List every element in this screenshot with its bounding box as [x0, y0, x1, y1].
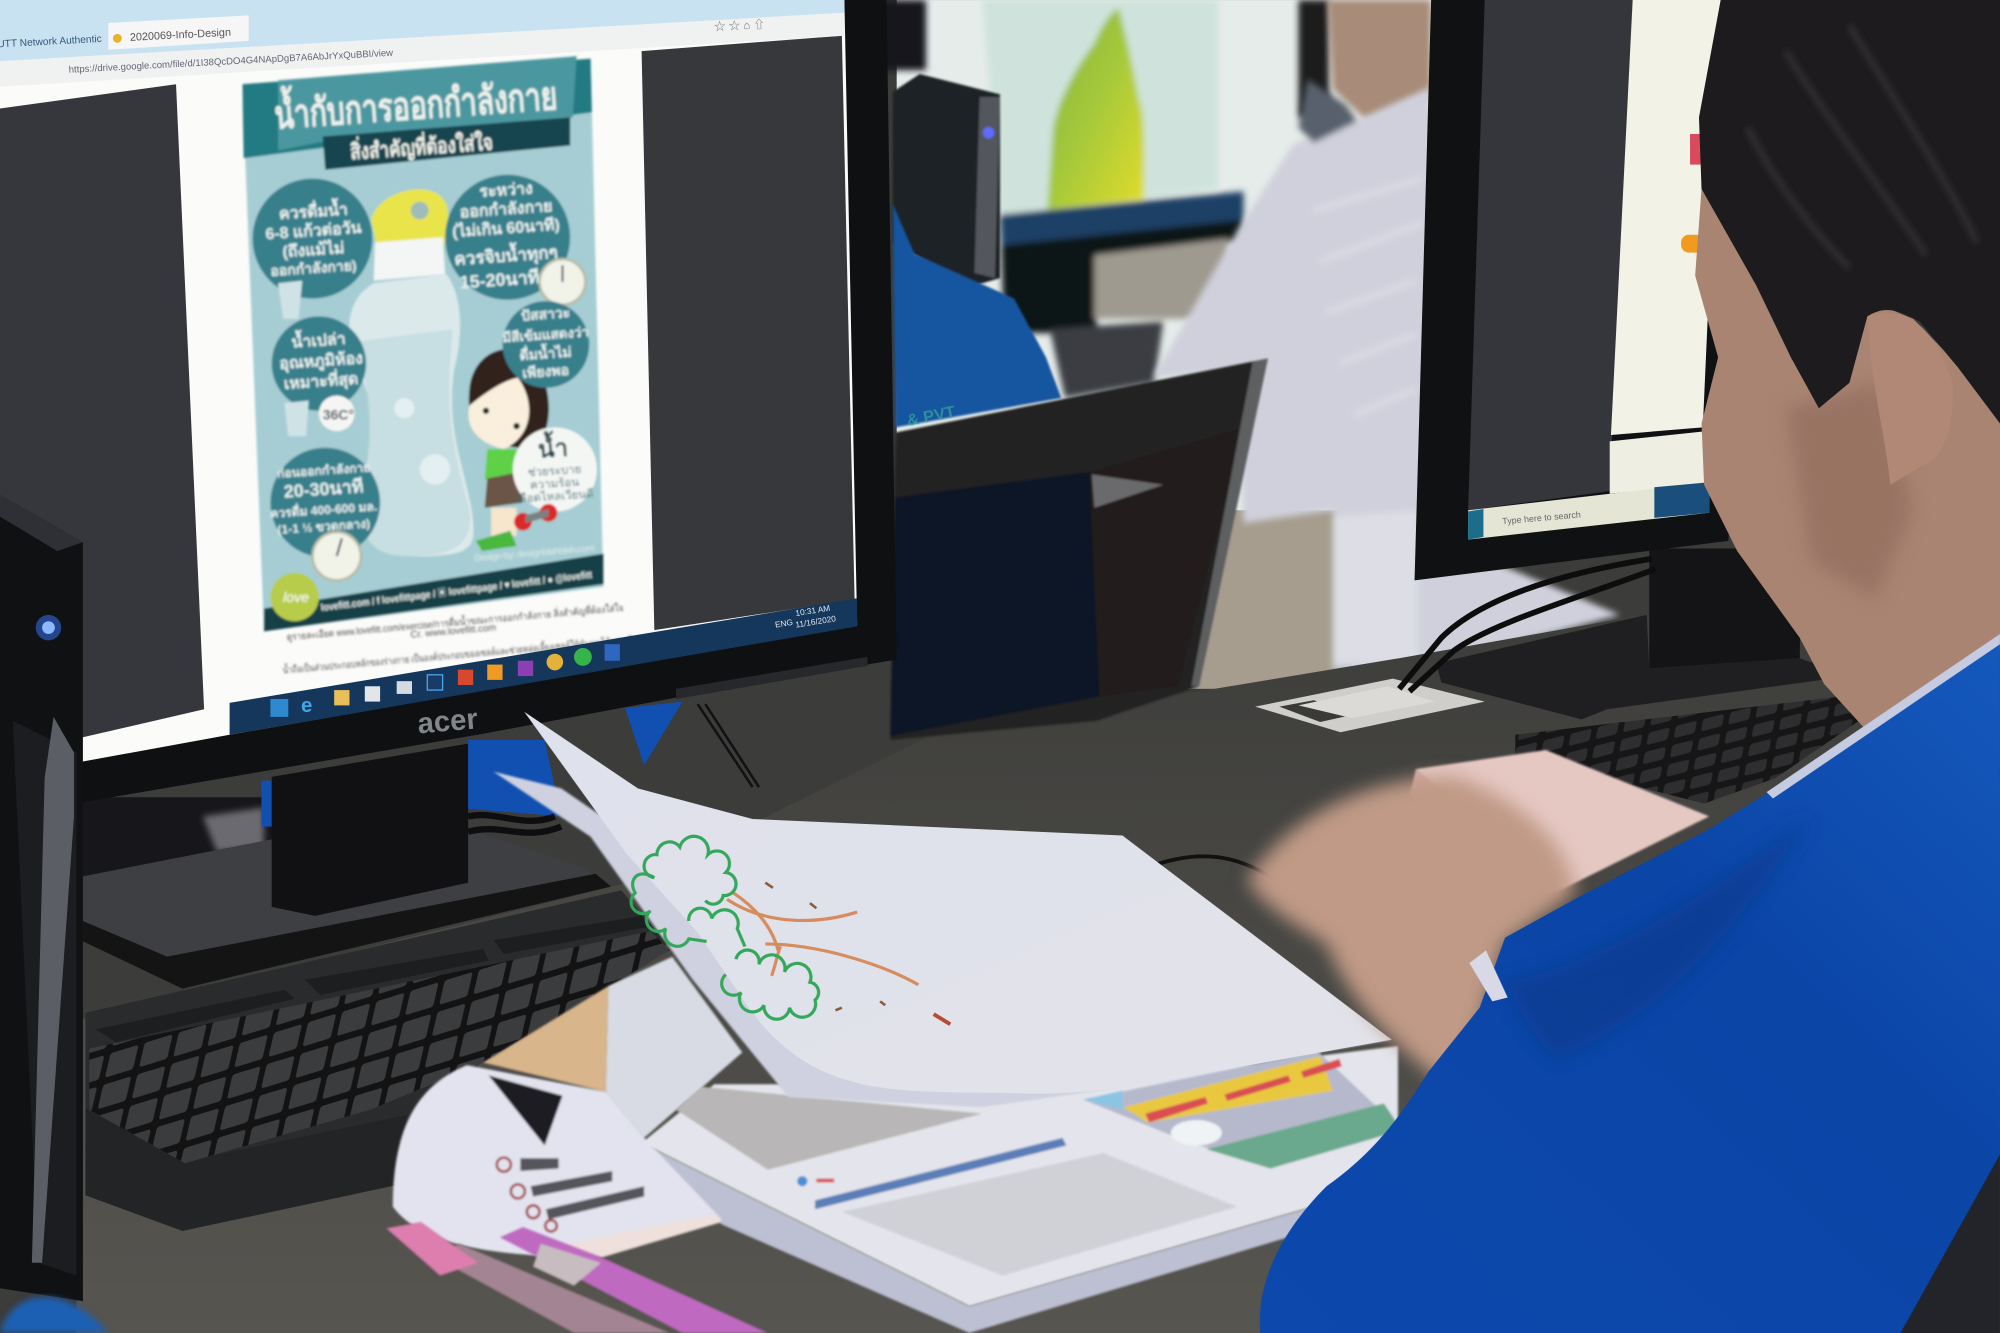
browser tab bar: 2020069-Info-Design [130, 27, 231, 44]
poster bubble: urine: ปัสสาวะ [520, 304, 571, 324]
system tray clock: ENG [774, 617, 794, 630]
background monitor with banana poster [880, 0, 1329, 398]
dark figure on page [489, 1075, 562, 1145]
shirt fold highlights [1314, 179, 1422, 415]
right monitor [1415, 0, 1760, 580]
poster bubble: urine [502, 301, 589, 388]
right monitor screen [1468, 0, 1722, 540]
browser address bar: https://drive.google.com/file/d/1I38QcDO4G4NApDgB7A6AbJrYxQuBBI/view [68, 48, 393, 76]
poster bubble: before exercise [270, 448, 380, 580]
poster girl character [469, 349, 549, 551]
main keyboard [85, 890, 670, 1231]
left monitor frame: acer [416, 702, 479, 740]
poster bubble: drink daily: 6-8 แก้วต่อวัน [265, 219, 362, 243]
book: right page [642, 1046, 1402, 1306]
tan text column [483, 986, 608, 1092]
pink pen [386, 1222, 670, 1333]
desk surface [77, 612, 2000, 1333]
student cheek shading [1786, 383, 1913, 600]
student ear [1867, 313, 1953, 485]
pink box on desk [1409, 750, 1709, 893]
pink strip at page edge [568, 1214, 722, 1258]
poster footer band: lovefitt.com / f lovefittpage / ▣ lovefittpage / ♥ lovefitt / ● @lovefitt [320, 569, 593, 614]
background computer tower [893, 74, 1000, 287]
tree sketch: green foliage [631, 836, 819, 1019]
poster bubble: before exercise: 20-30นาที [283, 476, 364, 502]
cables behind stand [468, 815, 561, 833]
book: left curled page [393, 957, 742, 1258]
black cord [1148, 856, 1276, 880]
book: page photo [676, 1087, 982, 1170]
poster bubble: urine: มีสีเข้มแสดงว่า [502, 324, 589, 345]
tree sketch: orange trunk and branches [727, 883, 950, 1024]
thin wire behind paper [698, 704, 759, 787]
left monitor stand [272, 744, 468, 916]
caption text under poster [282, 601, 633, 677]
student blurred hand [1247, 776, 1575, 1097]
poster bubble: during exercise: ระหว่าง [479, 180, 533, 201]
skin of background person [1328, 0, 1431, 121]
poster footer band [264, 554, 603, 631]
caption text under poster: ดูรายละเอียด www.lovefitt.com/exercise/การดื่มน้ำขณะการออกกำลังกาย สิ่งสำคัญที่ต้องใส่ใจ [286, 601, 624, 643]
poster bubble: during exercise: ออกกำลังกาย [459, 197, 553, 222]
student hair [1699, 0, 2000, 424]
curled page [393, 1065, 722, 1258]
poster water speech bubble: เลือดไหลเวียนดี [515, 487, 594, 506]
poster bubble: drink daily: (ถึงแม้ไม่ [282, 238, 345, 261]
poster bubble: drink daily [253, 179, 372, 319]
poster water speech bubble: ความร้อน [530, 476, 580, 492]
student face and neck [1695, 189, 2000, 740]
left monitor frame [0, 0, 897, 816]
desk cable grommet [1255, 679, 1485, 732]
taskbar app icons [270, 644, 620, 717]
hair strands [1747, 26, 1977, 268]
left dark side panel [0, 84, 204, 746]
poster bubble: before exercise: ก่อนออกกำลังกาย [277, 460, 371, 481]
book: social icon [797, 1176, 834, 1186]
infographic poster on screen [242, 56, 603, 631]
poster bubble: before exercise: (1-1 ½ ขวดกลาง) [277, 516, 370, 537]
purple highlighter [500, 1227, 768, 1333]
poster bubble: during exercise: 15-20นาที [459, 267, 540, 293]
jacket print on background person: & PVT [905, 402, 957, 430]
poster subtitle: สิ่งสำคัญที่ต้องใส่ใจ [349, 127, 494, 165]
drawing sheet [524, 712, 1392, 1094]
poster bubble: plain water [272, 316, 366, 436]
browser tab bar [0, 0, 844, 61]
poster water speech bubble [513, 427, 597, 512]
poster bubble: during exercise: (ไม่เกิน 60นาที) [452, 215, 560, 241]
poster credit: Design by: designblahblah.com [474, 543, 595, 564]
monitor cables [1399, 559, 1656, 691]
caption text under poster: น้ำถือเป็นส่วนประกอบหลักของร่างกาย เป็นองค์ประกอบของเซลล์และช่วยหล่อเลี้ยงเซลล์ให้ทำงานได้อย่างดี [282, 633, 633, 677]
left computer tower [0, 495, 83, 1301]
poster bottle [349, 189, 474, 556]
blue sleeve corner bottom left [0, 1297, 108, 1333]
seated student [1247, 0, 2000, 1333]
warning list [497, 1158, 644, 1232]
student jacket [1260, 642, 2000, 1333]
jacket shadow fold [1505, 816, 1811, 1059]
lower paper sheet [494, 772, 1392, 1107]
left monitor screen [0, 0, 857, 772]
poster water speech bubble: ช่วยระบาย [527, 464, 582, 479]
poster bubble: during exercise [445, 175, 585, 305]
poster bubble: drink daily: ออกกำลังกาย) [270, 257, 357, 279]
poster bubble: plain water: อุณหภูมิห้อง [279, 349, 364, 375]
poster footer band: love [283, 589, 309, 605]
book: thickness [642, 1143, 1348, 1333]
book: blurred body text [842, 1153, 1237, 1276]
right monitor screen: Type here to search [1502, 509, 1581, 526]
browser address bar: ☆ ☆ ⌂ ⇧ [714, 17, 765, 34]
background person in white shirt [1153, 79, 1620, 670]
base front edge [83, 874, 611, 989]
background chair [890, 358, 1268, 740]
tower power light [36, 615, 61, 640]
poster subtitle [323, 117, 570, 170]
poster bubble: plain water: น้ำเปล่า [291, 326, 346, 352]
right monitor stand [1436, 549, 1849, 719]
rising page [606, 957, 742, 1138]
jacket white collar [1767, 634, 2000, 799]
book: blue heading bar [815, 1138, 1066, 1209]
background person in blue [893, 204, 1061, 427]
right keyboard [1515, 689, 1906, 804]
system tray clock: 11/16/2020 [795, 613, 837, 630]
poster bubble: urine: เพียงพอ [522, 362, 569, 381]
system tray clock: 10:31 AM [795, 603, 831, 618]
dark chair foreground corner [1901, 1154, 2000, 1333]
poster red dumbbell [514, 504, 557, 531]
browser address bar [0, 13, 844, 87]
taskbar app icons: e [301, 695, 312, 717]
caption text under poster: Cr. www.lovefitt.com [410, 622, 497, 641]
blue object behind monitor [468, 702, 682, 816]
right dark side panel [642, 36, 855, 630]
poster bubble: during exercise: ควรจิบน้ำทุกๆ [453, 239, 559, 270]
poster bubble: urine: ดื่มน้ำไม่ [519, 341, 572, 363]
watch cuff [1469, 950, 1508, 1001]
browser tab bar: UTT Network Authentic [0, 34, 102, 50]
system tray clock [774, 603, 837, 630]
area below left monitor [83, 781, 274, 887]
poster water speech bubble: น้ำ [537, 429, 569, 464]
left monitor base [83, 829, 611, 986]
windows taskbar [230, 598, 857, 735]
poster bubble: before exercise: ควรดื่ม 400-600 มล. [270, 497, 378, 521]
poster title band [242, 56, 592, 158]
poster bubble: plain water: 36C° [323, 407, 354, 423]
poster bubble: drink daily: ควรดื่มน้ำ [278, 197, 348, 223]
poster title band: น้ำกับการออกกำลังกาย [273, 66, 559, 138]
function key row [96, 916, 652, 1042]
poster bubble: plain water: เหมาะที่สุด [283, 367, 359, 394]
book: page illustration [1083, 1051, 1402, 1168]
